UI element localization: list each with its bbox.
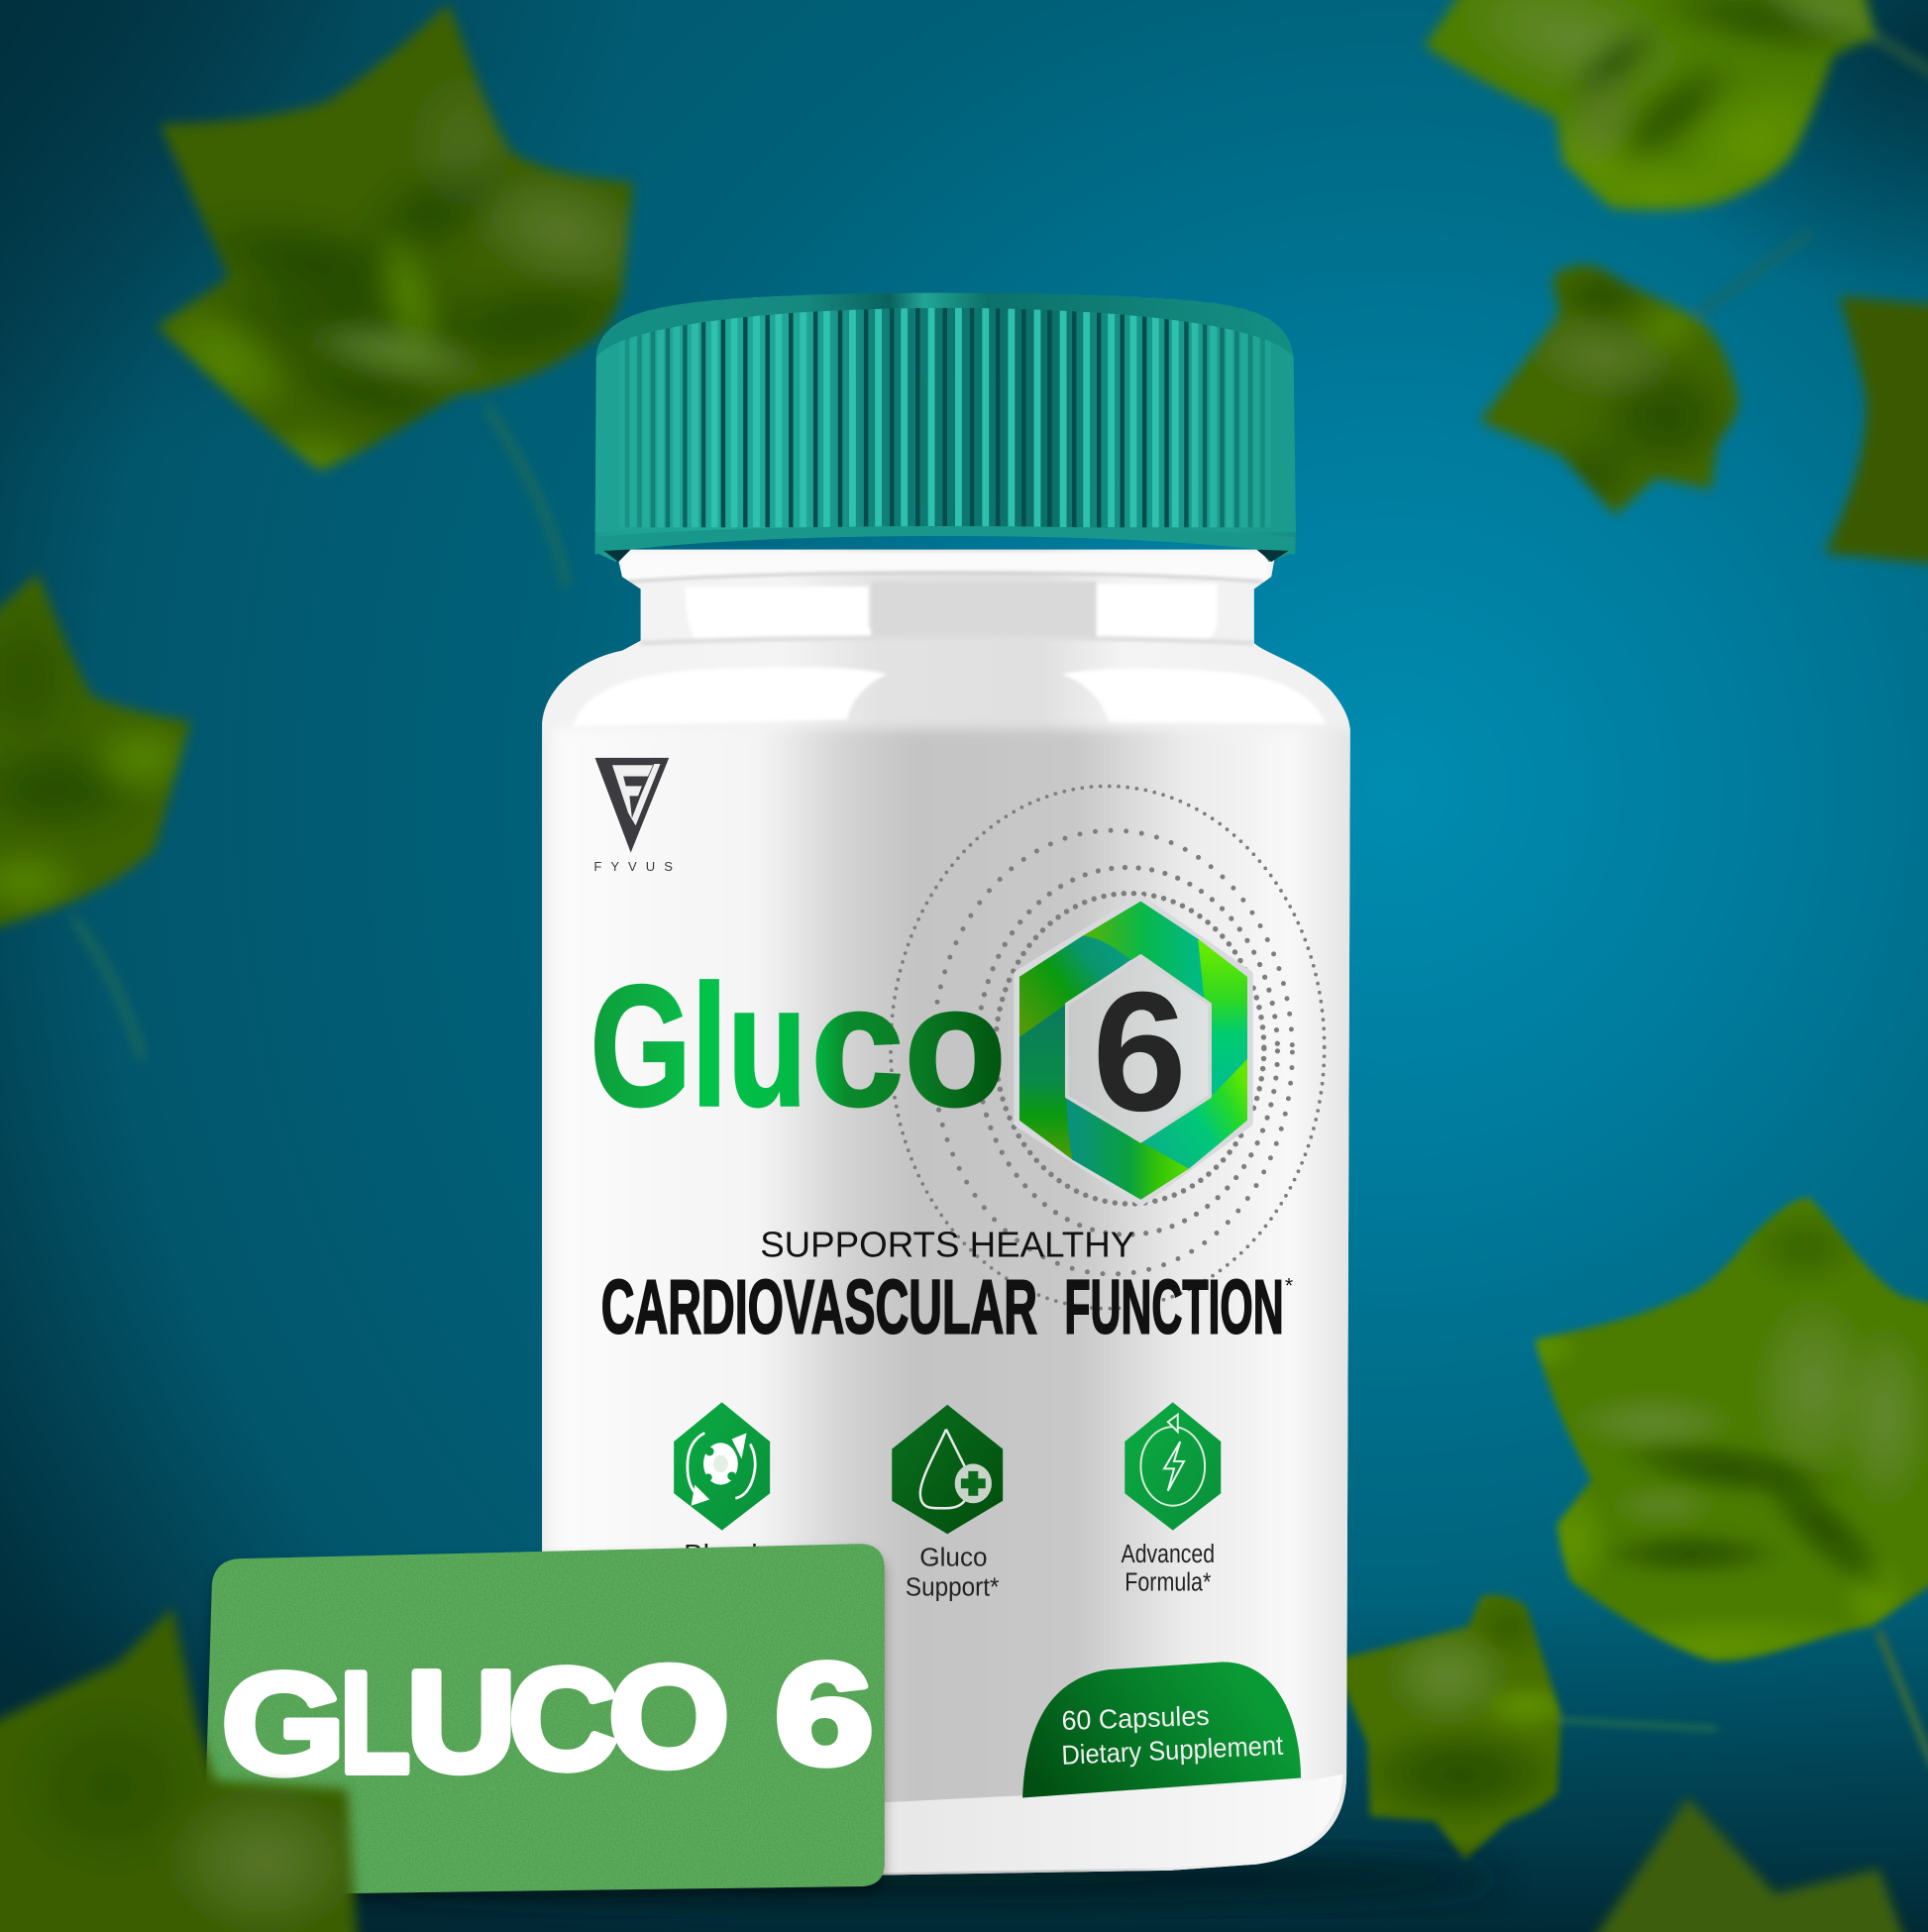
icon label: gluco support: [906, 1543, 999, 1601]
leaf: right edge: [1825, 295, 1928, 565]
cap edge fade: [595, 290, 1296, 532]
brand logo: Fyvus: FYVUS: [593, 859, 673, 874]
bottle: [517, 290, 1380, 1912]
icon label: advanced formula: Formula*: [1125, 1567, 1211, 1597]
numeral 6: 6: [1092, 957, 1187, 1147]
tagline: [601, 1224, 1293, 1350]
icon label: advanced formula: Advanced: [1122, 1539, 1215, 1568]
leaf: right upper: [1479, 232, 1811, 516]
product name: Gluco: Glu: [590, 949, 806, 1142]
leaf: bottom left foreground: [0, 1608, 364, 1932]
bottle neck and body: [517, 550, 1380, 1912]
green label card: [203, 1544, 885, 1902]
product name: Gluco: co: [810, 949, 1007, 1142]
icon: circulation: [674, 1402, 770, 1531]
cap ribs: [622, 295, 1268, 527]
icon: energy bolt: [1125, 1402, 1221, 1531]
icon label: blood: Blood: [684, 1539, 758, 1568]
capsules badge: [1022, 1663, 1301, 1797]
tagline: *: [1285, 1275, 1293, 1298]
brand logo: Fyvus: [593, 758, 673, 874]
icon label: advanced formula: [1122, 1539, 1215, 1597]
cap ribs: highlights: [622, 295, 1268, 527]
label shading: [517, 729, 1380, 1912]
emblem swirl segments: [1020, 902, 1246, 1199]
icon label: gluco support: Gluco: [919, 1543, 988, 1572]
dotted concentric rings: [891, 786, 1325, 1309]
neck highlights: [686, 587, 872, 638]
shoulder highlights: [573, 667, 887, 727]
capsules badge: 60 Capsules: [1061, 1700, 1210, 1736]
icon: drop with plus: [892, 1405, 1003, 1534]
inner hexagon: [1067, 956, 1210, 1141]
leaf: top right: [1424, 0, 1928, 227]
leaf: upper left: [135, 4, 664, 587]
cap rim: [596, 293, 1294, 358]
headline: cardiovascular function: CARDIOVASCULAR: [601, 1265, 1037, 1350]
base band: [881, 1774, 1342, 1873]
capsules badge: Dietary Supplement: [1061, 1730, 1284, 1771]
tagline: SUPPORTS HEALTHY: [760, 1224, 1134, 1264]
label text: O: [608, 1636, 729, 1796]
label text: L: [340, 1642, 410, 1802]
cap: [595, 290, 1296, 562]
icon label: gluco support: Support*: [906, 1571, 999, 1601]
neck ring: [573, 552, 1326, 727]
headline: cardiovascular function: FUNCTION: [1064, 1265, 1284, 1350]
leaf: lower right large: [1501, 1198, 1928, 1769]
label text: U: [406, 1641, 516, 1801]
label text: C: [509, 1639, 617, 1799]
leaf: left: [0, 573, 197, 1060]
label text: G: [222, 1644, 345, 1804]
bottle shadow: [370, 1855, 1503, 1903]
label text: 6: [775, 1634, 874, 1794]
leaf: lower middle right: [1333, 1594, 1717, 1860]
hexagon emblem with 6: [1017, 897, 1250, 1204]
leaf: bottom right: [1589, 1797, 1907, 1932]
cap ribs: grooves: [627, 295, 1263, 527]
cap lower lip: [595, 526, 1295, 555]
